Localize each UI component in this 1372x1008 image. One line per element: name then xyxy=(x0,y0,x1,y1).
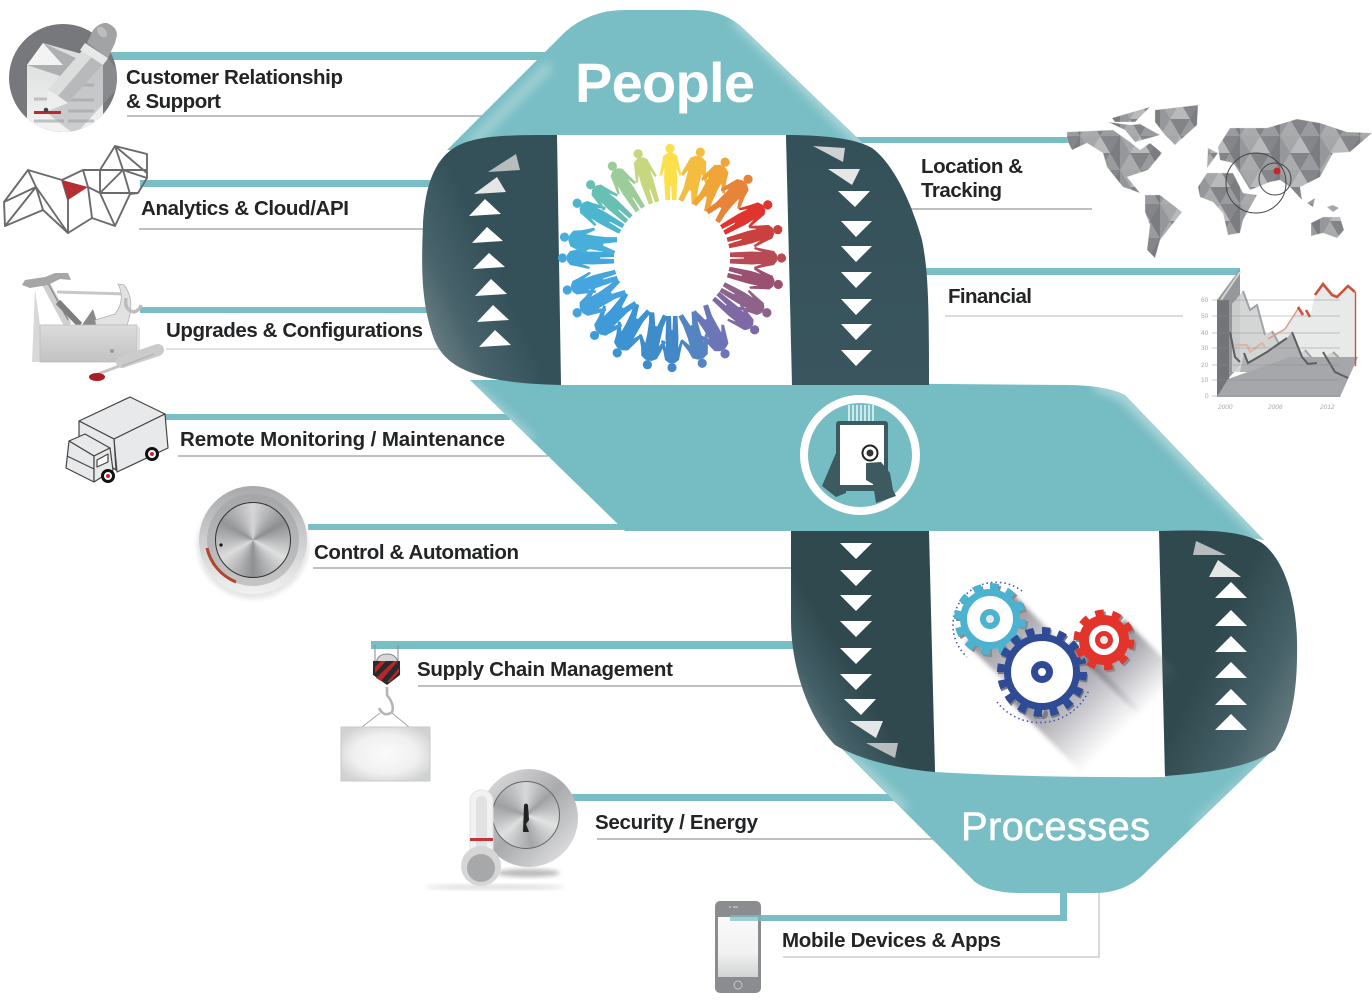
row: Customer Relationship & Support: Customer Relationship xyxy=(126,66,343,89)
chart: 3D area chart 2000 to 2012: 10 xyxy=(1201,377,1209,384)
panel: lower right dark band xyxy=(1159,530,1297,776)
row: Analytics & Cloud/API xyxy=(139,180,435,229)
row: Control & Automation: Control & Automation xyxy=(314,541,519,564)
gear: red xyxy=(1077,613,1133,669)
ribbon fold: People xyxy=(447,10,870,150)
heading: Processes: Processes xyxy=(961,805,1150,849)
ribbon fold: Processes xyxy=(838,745,1278,893)
chart: 3D area chart 2000 to 2012: 2006 xyxy=(1267,404,1283,411)
row: Control & Automation xyxy=(308,524,795,568)
icon: crane hook with sign xyxy=(341,645,430,781)
arrows: lower right band pointing up xyxy=(1193,541,1247,730)
panel: upper left dark band xyxy=(422,135,561,385)
chart: 3D area chart 2000 to 2012: 20 xyxy=(1201,362,1209,369)
row: Security / Energy xyxy=(565,794,940,839)
gear: cyan xyxy=(959,588,1023,652)
icon: toolbox with tools xyxy=(22,273,158,381)
chart: 3D area chart 2000 to 2012: 40 xyxy=(1201,330,1209,337)
row: Upgrades & Configurations: Upgrades & Configurations xyxy=(166,319,423,342)
row: Remote Monitoring / Maintenance xyxy=(165,414,548,456)
row: Location & Tracking: Tracking xyxy=(921,179,1002,202)
row: Supply Chain Management: Supply Chain Management xyxy=(417,658,673,681)
arrows: upper right band pointing down xyxy=(813,146,872,366)
row: Location & Tracking: Location & xyxy=(921,155,1023,178)
icon: smartphone xyxy=(715,901,761,993)
icon: safe lock and thermometer xyxy=(425,769,578,890)
icon: ring of colourful people xyxy=(558,144,786,372)
row: Remote Monitoring / Maintenance: Remote Monitoring / Maintenance xyxy=(180,428,505,451)
panel: upper right dark band xyxy=(786,135,929,385)
icon: low-poly world map with location target xyxy=(1067,105,1372,258)
row: Financial: Financial xyxy=(948,285,1032,308)
panel: lower left dark band xyxy=(791,531,935,772)
row: Mobile Devices & Apps: Mobile Devices & Apps xyxy=(782,929,1001,952)
gear: blue xyxy=(1002,632,1083,714)
row: Supply Chain Management xyxy=(371,641,815,686)
icon: delivery truck xyxy=(66,397,168,482)
row: Location & Tracking xyxy=(850,137,1092,209)
ribbon fold: middle band xyxy=(470,380,1264,540)
icon: metal control dial xyxy=(197,486,309,599)
row: Security / Energy: Security / Energy xyxy=(595,811,759,834)
panel: processes white window xyxy=(929,531,1165,777)
chart: 3D area chart 2000 to 2012: 2012 xyxy=(1319,404,1335,411)
row: Upgrades & Configurations xyxy=(140,307,440,349)
chart: 3D area chart 2000 to 2012: 50 xyxy=(1201,313,1209,320)
chart: 3D area chart 2000 to 2012 xyxy=(1201,269,1358,411)
arrows: upper left band pointing up xyxy=(469,154,520,347)
row: Mobile Devices & Apps xyxy=(730,885,1099,957)
chart: 3D area chart 2000 to 2012: 60 xyxy=(1201,297,1209,304)
icon: interlocking gears with long shadows xyxy=(953,582,1160,742)
row: Customer Relationship & Support: & Support xyxy=(126,90,221,113)
chart: 3D area chart 2000 to 2012: 0 xyxy=(1205,393,1209,400)
icon: hands holding tablet in circle xyxy=(804,399,916,511)
chart: 3D area chart 2000 to 2012: 30 xyxy=(1201,345,1209,352)
row: Customer Relationship & Support xyxy=(105,52,550,116)
row: Financial xyxy=(920,268,1240,316)
panel: people white window xyxy=(555,135,792,385)
heading: People: People xyxy=(575,51,755,114)
chart: 3D area chart 2000 to 2012: 2000 xyxy=(1217,404,1233,411)
icon: folded polygon map xyxy=(4,146,147,233)
row: Analytics & Cloud/API: Analytics & Cloud/API xyxy=(141,197,349,220)
arrows: lower left band pointing down xyxy=(840,543,898,758)
icon: document and pencil xyxy=(9,23,125,135)
